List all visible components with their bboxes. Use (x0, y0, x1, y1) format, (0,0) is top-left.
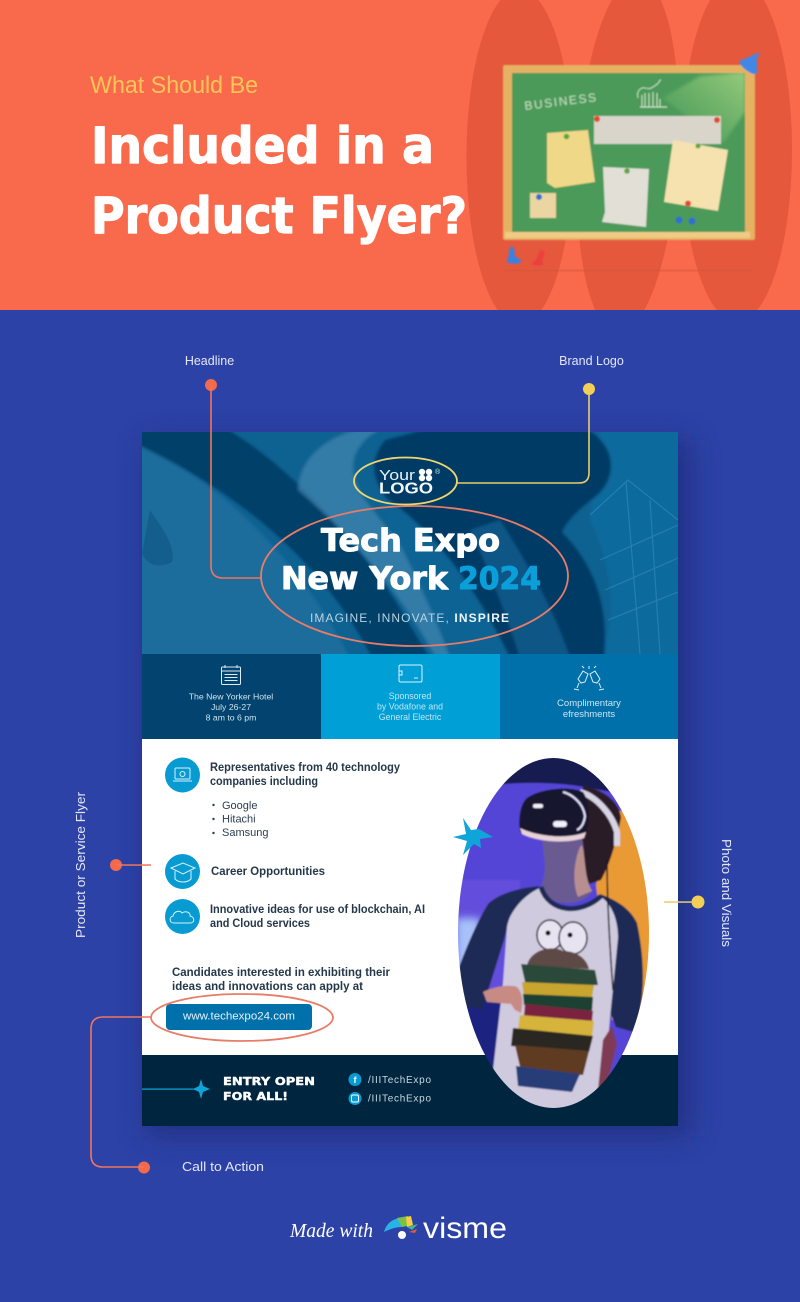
burger graphic (511, 920, 598, 1092)
footer credit: made with visme: visme (423, 1212, 507, 1245)
callout: brand logo: Brand Logo (559, 354, 624, 368)
company list: Google (222, 800, 257, 812)
call to action text (172, 967, 391, 993)
venue text: July 26-27 (211, 702, 251, 712)
feature item: career (165, 854, 325, 889)
website button (166, 1004, 312, 1030)
feature item: representatives: Representatives from 40 technology (210, 762, 401, 774)
refreshments text: efreshments (563, 709, 615, 720)
logo: ® (435, 468, 441, 476)
title: Included in a (91, 117, 434, 175)
footer line and star (142, 1079, 210, 1099)
flyer tagline: IMAGINE, INNOVATE, INSPIRE (310, 611, 509, 625)
flyer headline: New York (281, 561, 449, 597)
sponsors text: Sponsored (389, 691, 431, 701)
icon: red push pin (532, 250, 545, 266)
sponsors text: by Vodafone and (377, 702, 443, 712)
white note (602, 167, 649, 227)
footer entry message (142, 1075, 315, 1103)
dark central blob (374, 428, 611, 658)
light beam (663, 72, 745, 143)
sponsors text: General Electric (379, 712, 442, 722)
call to action text: ideas and innovations can apply at (172, 981, 363, 993)
social links: f (354, 1075, 358, 1085)
header background (0, 0, 800, 336)
flyer hero image (138, 428, 682, 658)
cream note (664, 140, 728, 211)
callout: call to action (91, 994, 333, 1174)
dark band (138, 428, 430, 658)
neck and face (540, 836, 592, 903)
feature item: innovative ideas: and Cloud services (210, 918, 310, 930)
company list (212, 800, 268, 839)
flyer headline: 2024 (458, 561, 541, 597)
social links: /IIITechExpo (368, 1075, 431, 1086)
cable (607, 860, 613, 990)
refreshments text (557, 698, 621, 720)
board green surface (512, 73, 745, 232)
chalk word: BUSINESS (524, 90, 597, 113)
feature item: career: Career Opportunities (211, 866, 325, 878)
icon: laptop (165, 758, 200, 792)
pins (536, 116, 720, 224)
icon: cloud (165, 899, 200, 934)
footer credit: made with visme (289, 1212, 507, 1245)
light swoosh (296, 432, 450, 654)
photo: person in VR headset (458, 758, 649, 1108)
logo: LOGO (379, 480, 433, 498)
illustration: bulletin board (503, 52, 760, 271)
callout: brand logo (354, 354, 624, 504)
sleeves (458, 886, 540, 1010)
collar (541, 887, 601, 909)
feature item: innovative ideas: Innovative ideas for use of blockchain, AI (210, 904, 425, 916)
social links: /IIITechExpo (368, 1094, 431, 1104)
yellow note (547, 130, 595, 188)
top right lighter (590, 428, 682, 658)
icon: blue lamp (739, 52, 760, 74)
logo: Your (379, 467, 415, 484)
blue main background (0, 310, 800, 1302)
feature item: representatives (165, 758, 401, 839)
call to action text: Candidates interested in exhibiting their (172, 967, 391, 979)
title: Product Flyer? (91, 187, 467, 245)
sponsors text (377, 691, 443, 722)
feature item: representatives: companies including (210, 776, 318, 788)
icon: blue push pin (507, 247, 522, 264)
feature item: innovative ideas (165, 899, 425, 934)
wide note (594, 116, 721, 144)
background orange (595, 810, 649, 1021)
chalk chart (638, 80, 667, 107)
callout: photo and visuals (664, 839, 734, 948)
window glow (456, 918, 480, 973)
callout: photo and visuals: Photo and Visuals (719, 839, 734, 948)
refreshments text: Complimentary (557, 698, 621, 709)
info bar: refreshments (500, 654, 678, 739)
icon: visme logo (384, 1216, 418, 1239)
small note (530, 193, 556, 218)
venue text (189, 692, 273, 722)
subtitle: What Should Be (90, 72, 258, 99)
background purple (458, 782, 632, 1077)
white shirt (493, 888, 618, 1110)
board frame (503, 65, 755, 240)
footer band (142, 1055, 678, 1126)
footer entry message: ENTRY OPEN (223, 1075, 315, 1088)
callout: call to action: Call to Action (182, 1159, 264, 1174)
callout: headline: Headline (185, 354, 234, 368)
logo (379, 467, 441, 498)
callout: product or service flyer (73, 791, 151, 938)
flyer shadow (146, 440, 691, 1136)
panel: flyer (138, 428, 682, 1126)
info bar: venue (142, 654, 321, 739)
building (590, 480, 678, 654)
website button: www.techexpo24.com (182, 1010, 295, 1022)
callout: product or service flyer: Product or Service Flyer (73, 791, 88, 938)
title (91, 117, 467, 245)
hand (483, 986, 522, 1013)
social links (348, 1073, 431, 1105)
mid diagonal band (386, 498, 510, 654)
venue text: 8 am to 6 pm (206, 712, 256, 722)
flyer headline (281, 523, 541, 597)
icon: cyan star on photo (453, 818, 493, 855)
white content area (142, 739, 678, 1055)
board shadow line (505, 270, 752, 271)
icon: clinking glasses (574, 666, 604, 690)
icon: calendar (222, 665, 240, 684)
light lower-left (138, 445, 350, 658)
company list: Samsung (222, 827, 268, 839)
flyer headline: Tech Expo (321, 523, 500, 559)
icon: card (399, 665, 422, 682)
icon: graduation cap (165, 854, 200, 889)
headset strap (580, 792, 617, 846)
hair (582, 786, 622, 885)
footer credit: made with visme: Made with (289, 1220, 373, 1242)
footer entry message: FOR ALL! (223, 1090, 288, 1103)
background dark top (502, 758, 610, 792)
venue text: The New Yorker Hotel (189, 692, 273, 702)
headset (519, 789, 589, 840)
callout: headline (185, 354, 568, 646)
info bar: sponsors (321, 654, 500, 739)
company list: Hitachi (222, 814, 256, 826)
